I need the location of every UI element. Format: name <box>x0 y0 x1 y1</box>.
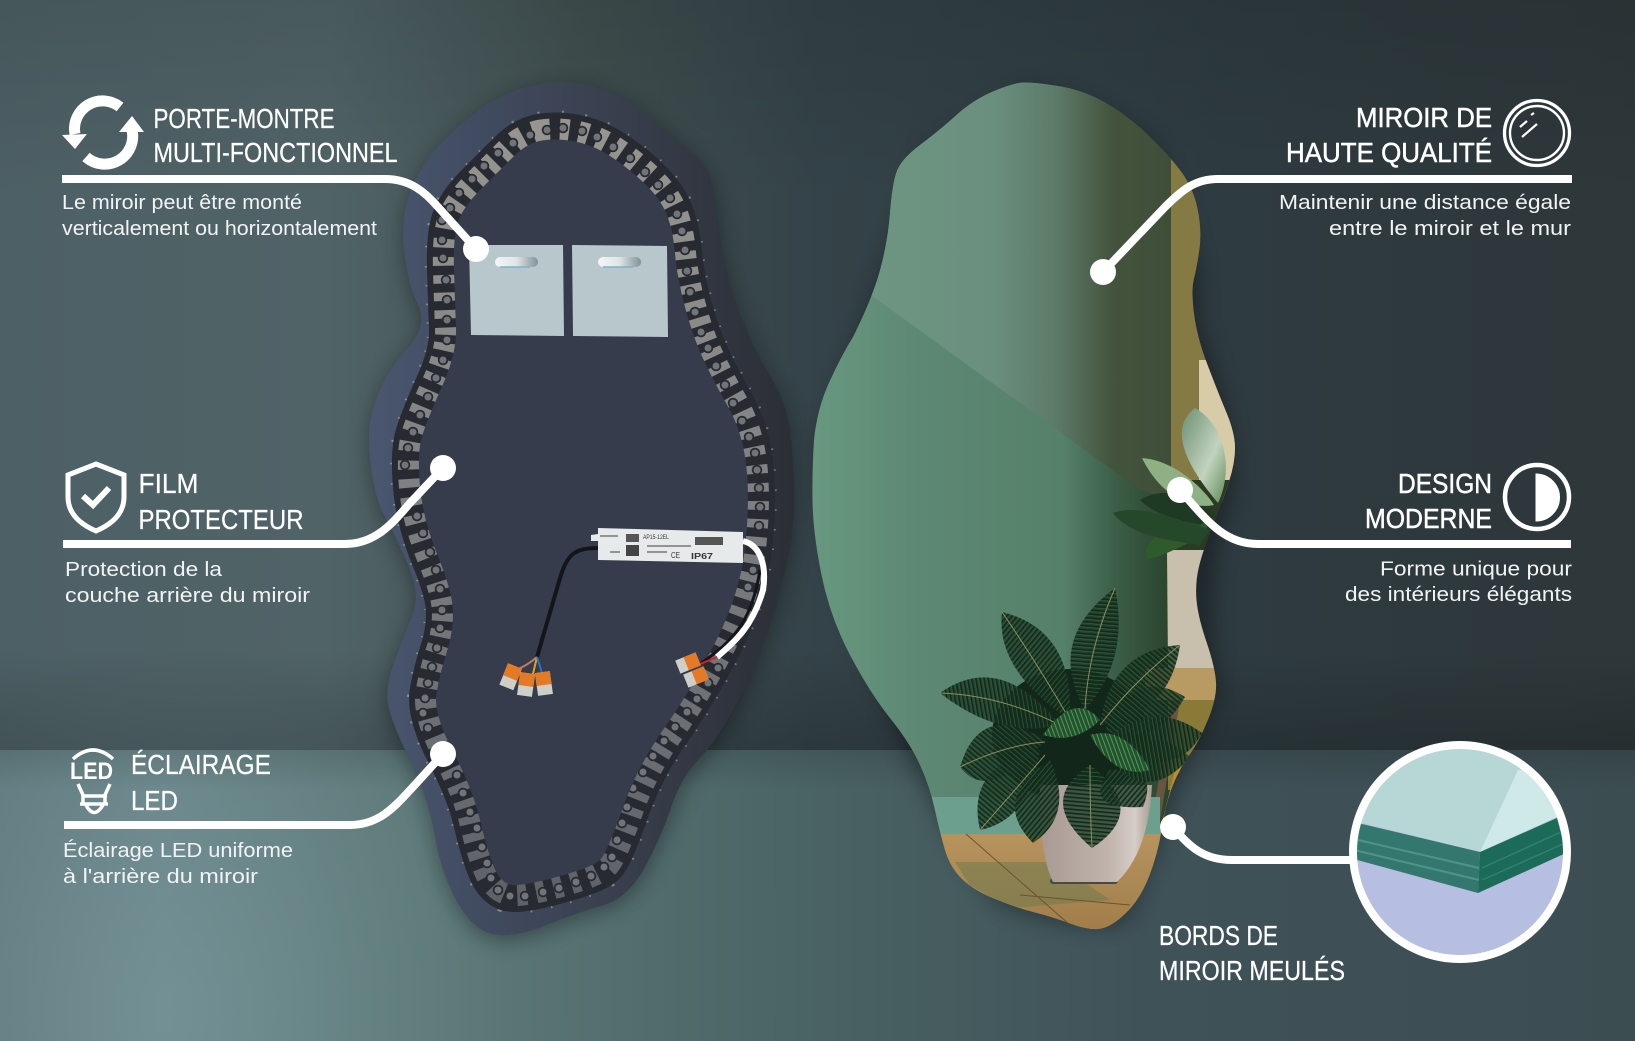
callout: film protecteur <box>65 464 310 607</box>
orange connectors <box>499 652 709 697</box>
heading: DESIGN <box>1398 468 1492 499</box>
heading: PORTE-MONTRE <box>154 103 334 134</box>
heading: BORDS DE <box>1159 920 1278 951</box>
palm plant: front fronds <box>960 708 1190 848</box>
icon: shield <box>68 464 124 531</box>
callout: porte-montre <box>62 101 398 240</box>
inner backing board <box>419 139 748 885</box>
plant pot <box>1040 785 1152 882</box>
heading: LED <box>131 785 178 816</box>
description: couche arrière du miroir <box>65 584 310 607</box>
heading: FILM <box>138 468 198 499</box>
reflected baseboard and floor <box>930 797 1160 834</box>
heading: MIROIR DE <box>1356 102 1492 133</box>
description: Éclairage LED uniforme <box>63 839 293 862</box>
callout: design moderne <box>1345 465 1572 606</box>
icon: rotation arrows <box>62 101 144 164</box>
callout lines <box>62 179 1572 860</box>
mounting plates with hooks <box>469 245 668 337</box>
heading: ÉCLAIRAGE <box>131 749 271 780</box>
callout: miroir de haute qualité <box>1279 100 1571 240</box>
heading: MIROIR MEULÉS <box>1159 955 1345 986</box>
heading: MULTI-FONCTIONNEL <box>154 137 398 168</box>
description: entre le miroir et le mur <box>1329 217 1571 240</box>
icon: half circle <box>1505 465 1569 529</box>
icon: round mirror <box>1504 100 1570 166</box>
upper right leaves <box>1113 408 1226 560</box>
panel: mirror front <box>800 70 1250 950</box>
LED driver with wires and connectors: CE <box>671 551 680 560</box>
description: Protection de la <box>65 558 223 581</box>
LED driver with wires and connectors: IP67 <box>691 552 714 561</box>
palm plant: back fronds <box>940 588 1202 801</box>
LED strip <box>405 128 760 896</box>
description: Le miroir peut être monté <box>62 191 302 214</box>
icon: LED bulb <box>70 750 113 812</box>
icon: LED bulb: LED <box>70 758 113 785</box>
heading: HAUTE QUALITÉ <box>1286 137 1492 168</box>
description: Maintenir une distance égale <box>1279 191 1571 214</box>
reflected doorway <box>1171 159 1235 480</box>
LED driver with wires and connectors <box>499 528 764 697</box>
heading: PROTECTEUR <box>138 504 304 535</box>
description: Forme unique pour <box>1380 558 1572 580</box>
description: des intérieurs élégants <box>1345 583 1572 606</box>
reflected vase and table <box>1167 550 1215 670</box>
callout: bords de miroir meulés <box>1159 740 1570 986</box>
panel: back of the mirror <box>369 82 795 940</box>
description: verticalement ou horizontalement <box>62 217 377 240</box>
heading: MODERNE <box>1365 503 1492 534</box>
description: à l'arrière du miroir <box>63 865 258 888</box>
LED driver with wires and connectors: AP15-12EL <box>643 535 670 541</box>
callout: éclairage LED <box>63 749 293 888</box>
circular glass edge detail <box>1340 740 1570 960</box>
